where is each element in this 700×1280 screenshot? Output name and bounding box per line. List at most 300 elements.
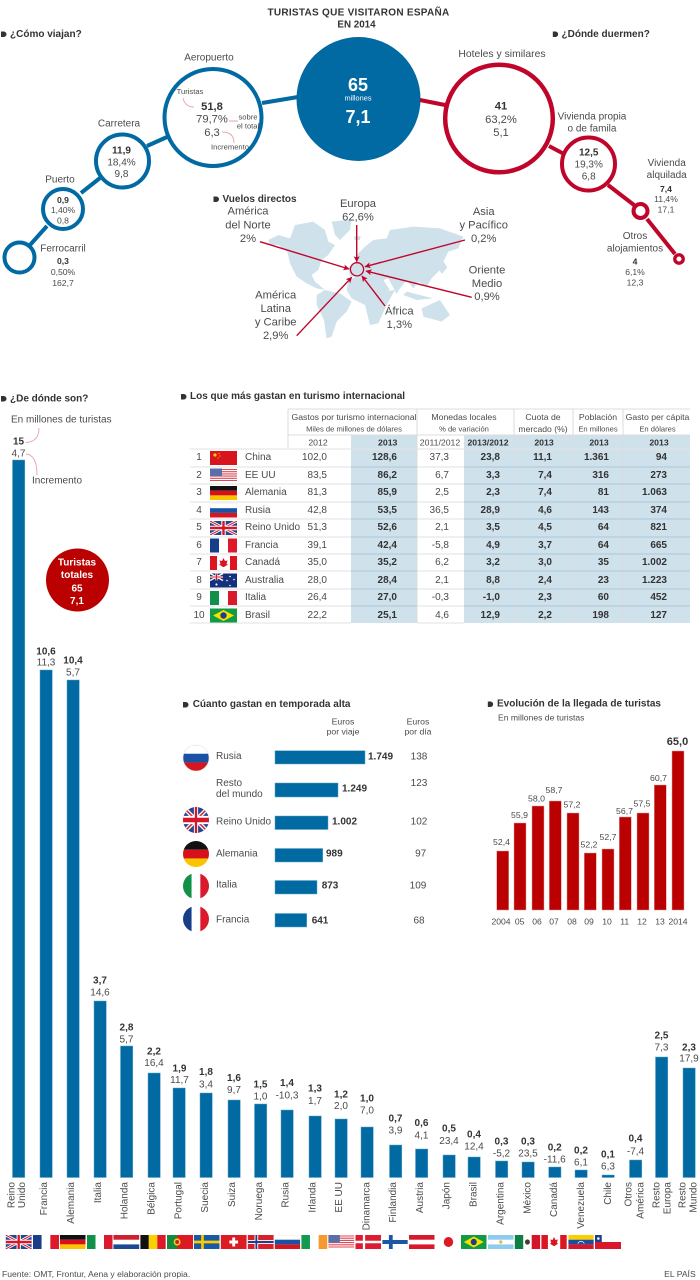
- table header: Población: [579, 412, 617, 422]
- bar chart: arrivals: 55,9: [511, 810, 528, 820]
- title: TURISTAS QUE VISITARON ESPAÑA: [267, 6, 450, 18]
- table header: En millones: [578, 424, 618, 434]
- row: Alemania: 7,4: [538, 487, 552, 498]
- flight labels: y Pacífico: [459, 220, 508, 232]
- circle: aeropuerto: 6,3: [204, 127, 220, 139]
- row: Alemania: [196, 486, 667, 500]
- connectors blue: [30, 97, 298, 245]
- table header: % de variación: [439, 424, 489, 434]
- table header: 2012: [308, 438, 328, 448]
- bar values: 2,3: [682, 1042, 696, 1054]
- row: Australia: 28,0: [308, 575, 327, 586]
- bar values: 2,5: [655, 1030, 669, 1042]
- country labels: EE UU: [334, 1182, 345, 1213]
- row: Reino Unido: 2,1: [435, 522, 449, 533]
- bar values: -10,3: [276, 1090, 299, 1102]
- row: Italia: [196, 591, 667, 605]
- country labels: Brasil: [468, 1182, 480, 1207]
- row: EE UU: 273: [650, 470, 667, 481]
- circle: otros alojamientos: 6,1%: [625, 267, 645, 277]
- bar values: 1,9: [173, 1064, 187, 1074]
- row: Alemania: 989: [326, 848, 343, 860]
- row: Francia: Francia: [216, 914, 250, 926]
- circle: carretera: 18,4%: [107, 158, 136, 168]
- row: Italia: 26,4: [308, 592, 327, 603]
- circle: otros alojamientos: alojamientos: [607, 244, 663, 254]
- circle: aeropuerto: el total: [237, 122, 259, 130]
- country labels: Canadá: [549, 1182, 560, 1217]
- row: China: 1.361: [584, 452, 609, 463]
- row: Canadá: 1.002: [642, 557, 667, 568]
- row: Italia: 2,3: [538, 592, 552, 603]
- callout: total tourists: [46, 548, 109, 612]
- table header: 2013: [649, 438, 669, 448]
- bar values: [12, 436, 699, 1172]
- row: China: 11,1: [533, 452, 552, 463]
- row: Resto del mundo: Resto: [216, 778, 243, 789]
- circle: total tourists: millones: [344, 94, 372, 102]
- row: Australia: 2,4: [538, 575, 552, 586]
- table shading: [351, 435, 690, 623]
- country labels: Japón: [442, 1182, 452, 1209]
- callout: total tourists: 65: [71, 584, 83, 594]
- row: Rusia: 4,6: [538, 505, 552, 516]
- bar values: 2,0: [334, 1101, 348, 1112]
- panel: how they travel: [1, 29, 420, 288]
- column headers: Euros: [332, 717, 355, 727]
- circle: vivienda propia: o de famila: [568, 124, 617, 134]
- row: Italia: 60: [598, 592, 609, 603]
- bar chart: arrivals: 60,7: [650, 773, 667, 783]
- row: Francia: 641: [312, 916, 329, 926]
- row: Francia: -5,8: [432, 540, 449, 551]
- row: Rusia: 28,9: [481, 505, 500, 516]
- row: Francia: [183, 906, 425, 932]
- circle: puerto: 0,8: [57, 216, 69, 226]
- circle: otros alojamientos: [607, 231, 683, 288]
- table header: Miles de millones de dólares: [306, 424, 402, 434]
- row: Resto del mundo: 123: [411, 778, 428, 789]
- bar values: 1,0: [254, 1092, 268, 1102]
- row: Canadá: 3,0: [538, 557, 552, 568]
- bar values: 7,0: [360, 1106, 374, 1116]
- flight labels: Asia: [473, 206, 495, 218]
- circle: puerto: Puerto: [45, 174, 75, 186]
- circle: vivienda propia: 19,3%: [575, 160, 603, 170]
- bar values: 15: [13, 436, 24, 448]
- bar values: 17,9: [679, 1054, 699, 1064]
- bar values: 4,7: [12, 448, 26, 460]
- bar chart: arrivals: [491, 736, 688, 927]
- row: Australia: 8,8: [486, 575, 500, 586]
- circle: aeropuerto: sobre: [238, 112, 258, 122]
- row: Alemania: Alemania: [245, 487, 287, 498]
- row: EE UU: 6,7: [435, 470, 449, 481]
- panel: direct flights: [214, 194, 508, 342]
- table header: Cuota de: [525, 412, 561, 422]
- bar values: 1,6: [227, 1073, 241, 1084]
- bar values: 7,3: [655, 1042, 669, 1054]
- circle: hoteles: 63,2%: [485, 114, 517, 126]
- country labels: Europa: [662, 1182, 674, 1214]
- row: Italia: 27,0: [378, 592, 397, 603]
- row: Alemania: 2,3: [486, 487, 500, 498]
- bar chart: arrivals: 58,0: [528, 794, 545, 804]
- bar values: 0,3: [495, 1136, 509, 1148]
- bar values: 0,6: [415, 1118, 429, 1129]
- row: Alemania: Alemania: [216, 848, 258, 860]
- circle: hoteles: 41: [495, 101, 507, 113]
- row: China: 23,8: [481, 452, 500, 463]
- row: Brasil: [193, 608, 667, 622]
- row: Reino Unido: 5: [196, 522, 202, 533]
- bar values: 0,1: [601, 1150, 615, 1160]
- row: Francia: Francia: [245, 540, 279, 551]
- table header: 2013/2012: [467, 438, 509, 448]
- table grid: [190, 409, 690, 623]
- row: Brasil: 198: [592, 610, 609, 621]
- origin circle: Spain: [350, 263, 364, 276]
- bar values: -5,2: [493, 1148, 511, 1160]
- row: Brasil: 2,2: [538, 610, 552, 621]
- bar values: 0,2: [548, 1142, 562, 1154]
- title: EN 2014: [337, 20, 376, 30]
- table header: En dólares: [639, 424, 676, 434]
- circle: vivienda propia: 12,5: [579, 148, 599, 158]
- bar values: 10,4: [63, 656, 83, 666]
- circle: vivienda propia: [558, 112, 627, 190]
- row: Rusia: 4: [196, 505, 202, 516]
- bar values: 12,4: [464, 1142, 484, 1152]
- source note: Fuente: OMT, Frontur, Aena y elaboración propia.: [2, 1269, 190, 1279]
- row: Reino Unido: 102: [411, 816, 428, 828]
- bar values: -7,4: [627, 1146, 645, 1158]
- circle: aeropuerto: 51,8: [201, 101, 223, 113]
- row: Canadá: [196, 556, 667, 570]
- circle: aeropuerto: [164, 52, 262, 166]
- circle: total tourists: [296, 37, 420, 161]
- bar values: 9,7: [227, 1085, 241, 1096]
- circle: vivienda alquilada: [634, 158, 687, 218]
- circle: ferrocarril: Ferrocarril: [40, 244, 86, 254]
- circle: ferrocarril: 0,50%: [51, 267, 76, 277]
- row: Reino Unido: Reino Unido: [245, 522, 300, 533]
- row: Francia: 665: [650, 540, 667, 551]
- circle: otros alojamientos: 4: [633, 257, 638, 267]
- row: Francia: 3,7: [538, 540, 552, 551]
- connectors red: [420, 100, 675, 254]
- row: Italia: 109: [410, 880, 427, 892]
- bar values: 1,7: [308, 1096, 322, 1107]
- bar values: 3,7: [93, 976, 107, 986]
- bar values: 1,3: [308, 1084, 322, 1094]
- circle: otros alojamientos: Otros: [623, 231, 647, 242]
- bar values: 0,2: [574, 1146, 588, 1156]
- row: EE UU: 316: [592, 470, 609, 481]
- callout: total tourists: 7,1: [70, 596, 84, 607]
- row: China: 102,0: [302, 452, 327, 463]
- row: Italia: [183, 873, 427, 899]
- flight labels: Oriente: [469, 265, 505, 277]
- flight labels: África: [385, 305, 414, 318]
- bar values: 10,6: [36, 646, 56, 658]
- bar chart: arrivals: 12: [637, 917, 647, 927]
- row: EE UU: [196, 468, 667, 482]
- bar values: 1,0: [360, 1094, 374, 1104]
- subheading: En millones de turistas: [498, 713, 584, 723]
- circle: ferrocarril: [4, 242, 86, 288]
- row: Italia: 9: [196, 592, 202, 603]
- country labels: Resto: [678, 1182, 688, 1208]
- row: Brasil: 10: [193, 610, 205, 621]
- column headers: Euros: [407, 717, 430, 727]
- bar chart: arrivals: 52,4: [493, 837, 510, 847]
- circle: total tourists: 65: [348, 75, 368, 95]
- row: Canadá: 3,2: [486, 557, 500, 568]
- row: Reino Unido: 52,6: [378, 522, 397, 533]
- row: Resto del mundo: del mundo: [216, 789, 263, 800]
- country labels: Venezuela: [576, 1182, 587, 1229]
- bar values: 6,1: [574, 1158, 588, 1168]
- row: Italia: Italia: [245, 592, 267, 603]
- country labels: Mundo: [688, 1182, 700, 1213]
- circle: vivienda propia: Vivienda propia: [558, 112, 627, 122]
- row: Francia: 6: [196, 540, 202, 551]
- row: Rusia: 374: [650, 505, 667, 516]
- heading: cómo viajan: ¿Cómo viajan?: [10, 29, 82, 40]
- row: China: 94: [656, 452, 667, 463]
- bar values: 0,4: [629, 1134, 643, 1144]
- bar values: 0,5: [442, 1124, 456, 1134]
- row: Francia: 4,9: [486, 540, 500, 551]
- circle: hoteles: [445, 49, 553, 172]
- flight labels: y Caribe: [255, 317, 297, 329]
- flight labels: 2,9%: [263, 330, 289, 342]
- row: Australia: 28,4: [378, 575, 397, 586]
- key notes: Incremento: [32, 476, 82, 486]
- row: Australia: 1.223: [642, 575, 667, 586]
- circle: vivienda alquilada: alquilada: [647, 170, 687, 181]
- row: China: 128,6: [372, 452, 397, 463]
- bar chart: arrivals: 57,2: [564, 800, 581, 810]
- bar values: 5,7: [66, 668, 80, 678]
- row: Italia: 873: [322, 880, 339, 892]
- flight labels: 0,9%: [474, 291, 500, 303]
- flight labels: Medio: [472, 278, 502, 290]
- row: Canadá: 35,2: [378, 557, 397, 568]
- country labels: [6, 1182, 700, 1230]
- flight labels: América: [255, 290, 297, 302]
- table header: 2013: [534, 438, 554, 448]
- panel: where they sleep: [420, 29, 687, 288]
- row: Alemania: 1.063: [642, 487, 667, 498]
- bar values: 1,2: [334, 1090, 348, 1100]
- row: Reino Unido: 3,5: [486, 522, 500, 533]
- flight labels: 62,6%: [342, 212, 374, 224]
- row: Brasil: 127: [650, 610, 667, 621]
- country labels: Italia: [93, 1182, 104, 1203]
- circle: vivienda alquilada: 17,1: [658, 205, 675, 215]
- bar values: 3,4: [199, 1080, 213, 1090]
- country labels: Suecia: [200, 1182, 211, 1213]
- row: Alemania: 85,9: [378, 487, 397, 498]
- bar chart: arrivals: 13: [655, 917, 665, 927]
- row: Australia: 23: [598, 575, 609, 586]
- bar values: -11,6: [544, 1154, 566, 1166]
- circle: vivienda propia: 6,8: [582, 172, 596, 182]
- bar values: 3,9: [389, 1126, 403, 1136]
- circle: vivienda alquilada: 11,4%: [654, 194, 678, 204]
- key notes: En millones de turistas: [11, 414, 112, 426]
- country labels: América: [636, 1182, 646, 1219]
- bar chart: arrivals: 58,7: [546, 785, 563, 795]
- country labels: Alemania: [66, 1182, 77, 1224]
- bar values: 5,7: [120, 1034, 134, 1046]
- bar chart: arrivals: 05: [515, 917, 525, 927]
- row: Reino Unido: [196, 521, 667, 535]
- circle: carretera: Carretera: [98, 118, 141, 130]
- circle: aeropuerto: Aeropuerto: [184, 52, 234, 64]
- row: Rusia: [183, 745, 428, 771]
- bar chart: arrivals: 10: [602, 917, 612, 927]
- world map: [268, 219, 463, 338]
- bar chart: arrivals: 2004: [491, 917, 511, 927]
- row: Brasil: 4,6: [435, 610, 449, 621]
- row: Resto del mundo: 1.249: [342, 784, 367, 794]
- table header: 2013: [589, 438, 609, 448]
- bar values: 4,1: [415, 1130, 429, 1142]
- row: Italia: -1,0: [483, 592, 500, 603]
- circle: vivienda alquilada: Vivienda: [648, 158, 686, 169]
- row: Australia: 8: [196, 575, 202, 586]
- country labels: Portugal: [174, 1182, 184, 1219]
- bar values: 0,4: [467, 1130, 481, 1140]
- bar chart: arrivals: 09: [584, 917, 594, 927]
- row: Rusia: [196, 504, 667, 518]
- circle: hoteles: 5,1: [493, 127, 509, 139]
- row: Rusia: 1.749: [368, 752, 393, 762]
- circle: total tourists: 7,1: [345, 107, 371, 127]
- heading: de dónde son: ¿De dónde son?: [10, 394, 88, 404]
- bar chart: arrivals: 06: [532, 917, 542, 927]
- circle: aeropuerto: 79,7%: [196, 114, 228, 126]
- row: Francia: 39,1: [308, 540, 327, 551]
- panel: high season spending: [183, 699, 432, 932]
- circle: puerto: [43, 174, 83, 229]
- country labels: Unido: [17, 1182, 28, 1208]
- circle: otros alojamientos: 12,3: [627, 278, 644, 288]
- country labels: Reino: [6, 1182, 18, 1208]
- column headers: por día: [404, 727, 432, 737]
- bar values: 11,3: [37, 658, 56, 668]
- country labels: Resto: [652, 1182, 662, 1208]
- bar values: 0,7: [389, 1114, 403, 1124]
- heading: cuánto gastan: Cúanto gastan en temporada alta: [193, 699, 351, 710]
- row: Alemania: 3: [196, 487, 202, 498]
- bar values: 11,7: [170, 1075, 189, 1086]
- row: EE UU: 2: [196, 470, 202, 481]
- bar chart: countries: [12, 460, 695, 1178]
- table header: 2011/2012: [420, 438, 460, 448]
- bar values: 6,3: [601, 1162, 615, 1172]
- title: [267, 6, 450, 30]
- circle: carretera: 11,9: [112, 146, 131, 156]
- bar chart: arrivals: 56,7: [616, 806, 633, 816]
- row: Rusia: 53,5: [378, 505, 397, 516]
- bar chart: arrivals: 57,5: [634, 799, 651, 809]
- circle: puerto: 1,40%: [51, 205, 76, 215]
- column headers: por viaje: [327, 727, 360, 737]
- bar chart: arrivals: 11: [620, 917, 629, 927]
- credit: EL PAÍS: [664, 1269, 696, 1279]
- heading: dónde duermen: ¿Dónde duermen?: [562, 29, 650, 40]
- row: Alemania: [183, 841, 427, 867]
- row: EE UU: 7,4: [538, 470, 552, 481]
- bar values: 14,6: [90, 988, 110, 998]
- circle: carretera: 9,8: [115, 169, 129, 180]
- row: Italia: -0,3: [432, 592, 449, 603]
- country labels: Argentina: [496, 1182, 506, 1225]
- country labels: Otros: [624, 1182, 634, 1206]
- panel: tourist arrivals evolution: [488, 698, 688, 927]
- country labels: Chile: [603, 1182, 614, 1205]
- table header: mercado (%): [518, 424, 568, 434]
- bar chart: arrivals: 08: [567, 917, 577, 927]
- flight labels: 2%: [240, 233, 256, 245]
- row: Brasil: 22,2: [308, 610, 327, 621]
- row: Italia: 452: [650, 592, 667, 603]
- row: Brasil: 25,1: [378, 610, 397, 621]
- bar values: 1,4: [280, 1078, 294, 1089]
- row: EE UU: EE UU: [245, 470, 276, 481]
- row: Rusia: 36,5: [430, 505, 449, 516]
- flight labels: Latina: [260, 303, 292, 315]
- bar values: 23,4: [439, 1136, 459, 1147]
- bar chart: arrivals: 52,7: [600, 832, 617, 842]
- row: Reino Unido: 821: [650, 522, 667, 533]
- flag strip: [6, 1235, 621, 1249]
- row: Australia: [196, 574, 667, 588]
- table header: [291, 412, 690, 448]
- table header: Monedas locales: [431, 412, 497, 422]
- row: Reino Unido: 1.002: [332, 816, 357, 828]
- heading: vuelos directos: Vuelos directos: [222, 194, 297, 205]
- row: Francia: 68: [413, 916, 425, 926]
- flight labels: 0,2%: [471, 233, 497, 245]
- row: Rusia: Rusia: [245, 505, 271, 516]
- circle: carretera: [96, 118, 149, 188]
- row: China: China: [245, 452, 272, 463]
- bar chart: arrivals: 65,0: [667, 736, 688, 748]
- flight labels: [225, 198, 508, 342]
- row: Reino Unido: 51,3: [308, 522, 327, 533]
- row: Canadá: 6,2: [435, 557, 449, 568]
- row: Alemania: 97: [415, 848, 427, 860]
- row: Canadá: 7: [196, 557, 202, 568]
- bar values: 1,8: [199, 1067, 213, 1078]
- row: Australia: Australia: [245, 575, 284, 586]
- bar values: 2,8: [120, 1022, 134, 1034]
- flight labels: América: [227, 206, 269, 218]
- circle: ferrocarril: 0,3: [57, 256, 69, 266]
- column headers: [327, 717, 432, 737]
- bar values: 23,5: [518, 1148, 538, 1160]
- bar values: 2,2: [147, 1046, 161, 1058]
- row: Rusia: 42,8: [308, 505, 327, 516]
- country labels: Bélgica: [146, 1182, 158, 1215]
- arrows: [260, 225, 472, 336]
- country labels: Dinamarca: [362, 1182, 372, 1230]
